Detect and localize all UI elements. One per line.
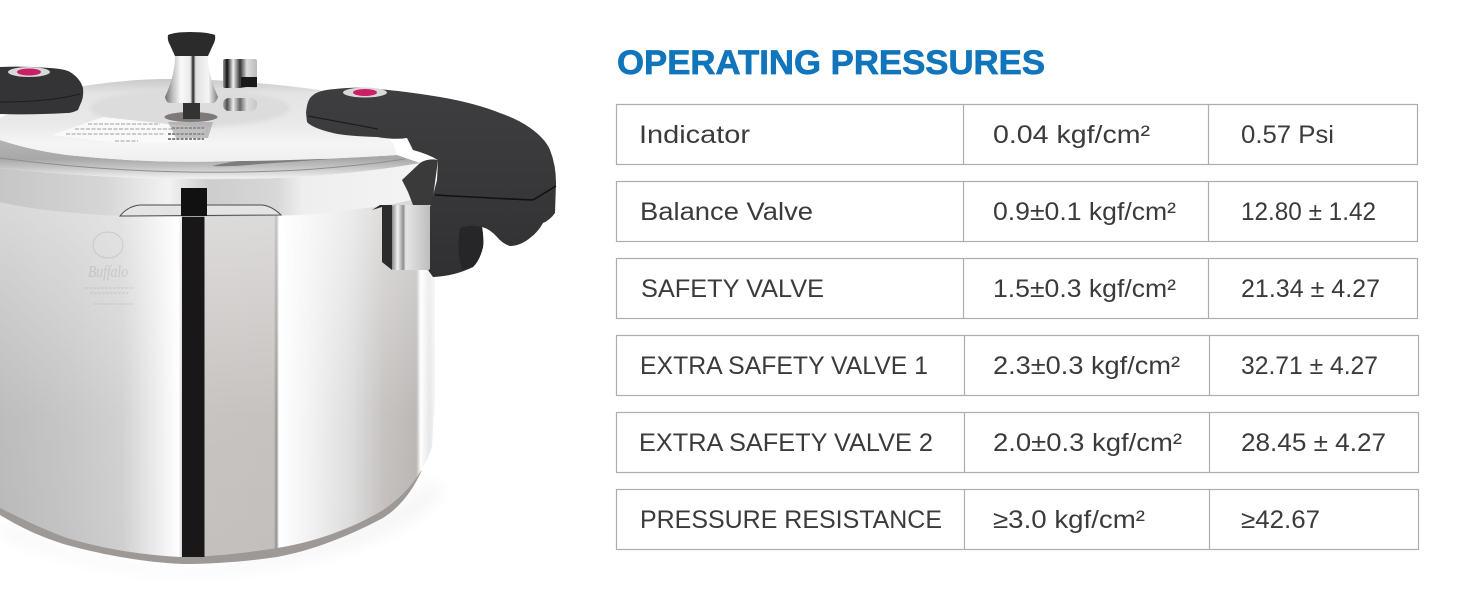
lid label [52, 117, 205, 143]
rim notch [120, 205, 281, 216]
handle bracket [402, 159, 438, 205]
row: pressure resistance [616, 490, 1418, 550]
pressure valve knob [164, 32, 218, 138]
row: extra safety valve 1: 2.3±0.3 kgf/cm² [993, 352, 1180, 380]
floor shadow [0, 480, 445, 574]
row: safety valve [616, 258, 1418, 318]
row: indicator: 0.04 kgf/cm² [993, 121, 1150, 149]
row: safety valve: 21.34 ± 4.27 [1241, 275, 1380, 303]
row: extra safety valve 2: EXTRA SAFETY VALVE 2 [639, 429, 933, 457]
row: indicator [616, 104, 1418, 164]
row: safety valve: 1.5±0.3 kgf/cm² [993, 275, 1176, 303]
row: extra safety valve 1 [616, 336, 1418, 396]
row: extra safety valve 1: 32.71 ± 4.27 [1241, 352, 1378, 380]
row: pressure resistance: ≥3.0 kgf/cm² [993, 506, 1145, 534]
lid inner circle [90, 89, 290, 127]
right handle [306, 88, 556, 277]
black bar in rim [181, 188, 207, 216]
row: pressure resistance: PRESSURE RESISTANCE [640, 506, 942, 534]
row: balance valve: 12.80 ± 1.42 [1241, 198, 1376, 226]
small safety valve [223, 59, 257, 111]
latch [372, 205, 430, 270]
black reflection bar [182, 205, 204, 557]
table: operating pressures [616, 104, 1418, 550]
row: balance valve: Balance Valve [640, 198, 813, 226]
body highlight [0, 200, 435, 557]
row: pressure resistance: ≥42.67 [1241, 506, 1320, 534]
row: balance valve: 0.9±0.1 kgf/cm² [993, 198, 1176, 226]
heading: OPERATING PRESSURES [617, 44, 1045, 82]
row: extra safety valve 1: EXTRA SAFETY VALVE 1 [640, 352, 928, 380]
row: indicator: 0.57 Psi [1241, 121, 1334, 149]
row: extra safety valve 2: 28.45 ± 4.27 [1241, 429, 1386, 457]
row: balance valve [616, 182, 1418, 242]
pressure cooker photo [0, 32, 556, 574]
rim lip [0, 140, 420, 179]
rim band [0, 163, 420, 217]
pot base rim [0, 470, 422, 564]
row: extra safety valve 2 [616, 412, 1418, 472]
lid [0, 79, 397, 162]
left handle [0, 67, 83, 114]
embossed brand mark [85, 232, 134, 304]
row: extra safety valve 2: 2.0±0.3 kgf/cm² [993, 429, 1182, 457]
pot body [0, 200, 435, 557]
embossed brand mark: Buffalo [88, 262, 128, 281]
row: safety valve: SAFETY VALVE [641, 275, 824, 303]
row: indicator: Indicator [639, 121, 750, 149]
